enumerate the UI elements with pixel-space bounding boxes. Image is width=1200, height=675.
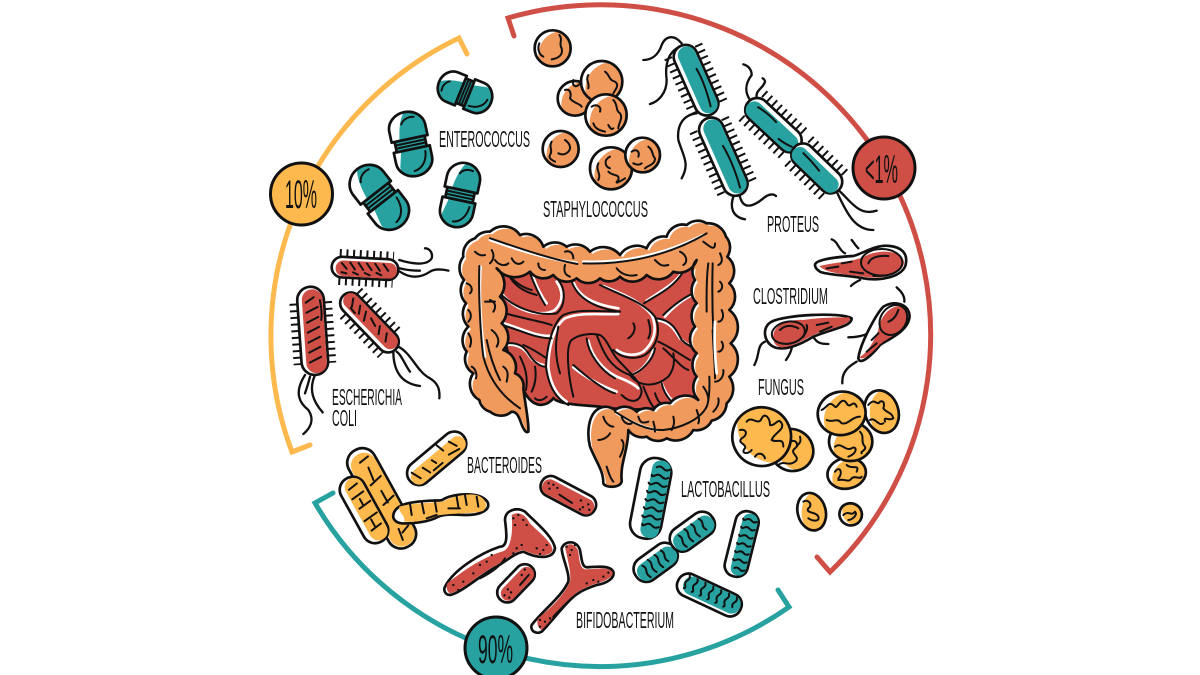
label: Escherichia coli: COLI [332, 405, 357, 431]
yeast small round [835, 499, 866, 530]
text: BACTEROIDES [467, 452, 542, 478]
bacterium top [331, 253, 399, 284]
badge: 90%: 90% [478, 628, 513, 672]
coccus single lower [543, 131, 579, 167]
large intestine [459, 221, 741, 489]
dumbbell rod [393, 494, 488, 523]
badge: below 1%: <1% [865, 148, 898, 192]
bacterium pair one [643, 37, 877, 230]
text: PROTEUS [767, 211, 819, 237]
coccus single top [535, 30, 571, 66]
rod tall [628, 455, 674, 541]
bacterium left [754, 315, 852, 365]
arc: red below 1% bracket [508, 5, 931, 572]
yeast pair [726, 401, 821, 479]
bacterium upper left [386, 108, 435, 180]
coccus pair [590, 138, 660, 189]
dumbbell rod [629, 507, 720, 587]
text: ESCHERICHIA [332, 384, 402, 410]
text: FUNGUS [758, 374, 804, 400]
bacterium lower left [342, 157, 416, 237]
group: proteus [643, 37, 877, 230]
rod right [722, 509, 761, 579]
text: BIFIDOBACTERIUM [576, 607, 674, 633]
rod lower [673, 570, 745, 620]
group: bacteroides [335, 427, 488, 554]
badge: 10%: 10% [285, 173, 317, 217]
bacterium right [437, 160, 483, 230]
group: clostridium [754, 239, 913, 383]
text: ENTEROCOCCUS [439, 126, 530, 152]
flagella [299, 248, 448, 434]
arc: teal 90% bracket [315, 493, 789, 667]
bacterium top [815, 239, 906, 286]
text: LACTOBACILLUS [681, 476, 770, 502]
group: staphylococcus [535, 30, 660, 189]
group: bifidobacterium [444, 472, 614, 633]
illustration: intestines [459, 221, 741, 489]
group: fungus [726, 386, 904, 534]
rod upper right [402, 427, 471, 490]
branched rod right [531, 542, 614, 633]
yeast small oval [793, 490, 830, 534]
bacterium top [433, 67, 497, 118]
bacterium left [292, 286, 333, 376]
yeast cluster [814, 386, 904, 492]
badge: 90% [465, 617, 527, 675]
text: STAPHYLOCOCCUS [543, 196, 648, 222]
short rod [493, 560, 539, 607]
arc: yellow 10% bracket [271, 38, 467, 452]
small intestine [497, 260, 698, 409]
badge: 10% [270, 163, 332, 225]
group: lactobacillus [628, 455, 761, 620]
bacterium right [842, 287, 913, 383]
group: enterococcus [342, 67, 497, 237]
label: Escherichia coli [332, 384, 402, 431]
group: escherichia coli [292, 248, 448, 434]
rod short [335, 472, 393, 548]
rod top [537, 472, 600, 519]
branched rod left [444, 509, 555, 595]
text: CLOSTRIDIUM [753, 283, 828, 309]
bacterium right [333, 285, 406, 360]
bacterium pair two [737, 90, 851, 202]
rod long [342, 443, 421, 554]
badge: below 1% [853, 137, 915, 199]
coccus cluster of three [558, 61, 627, 136]
